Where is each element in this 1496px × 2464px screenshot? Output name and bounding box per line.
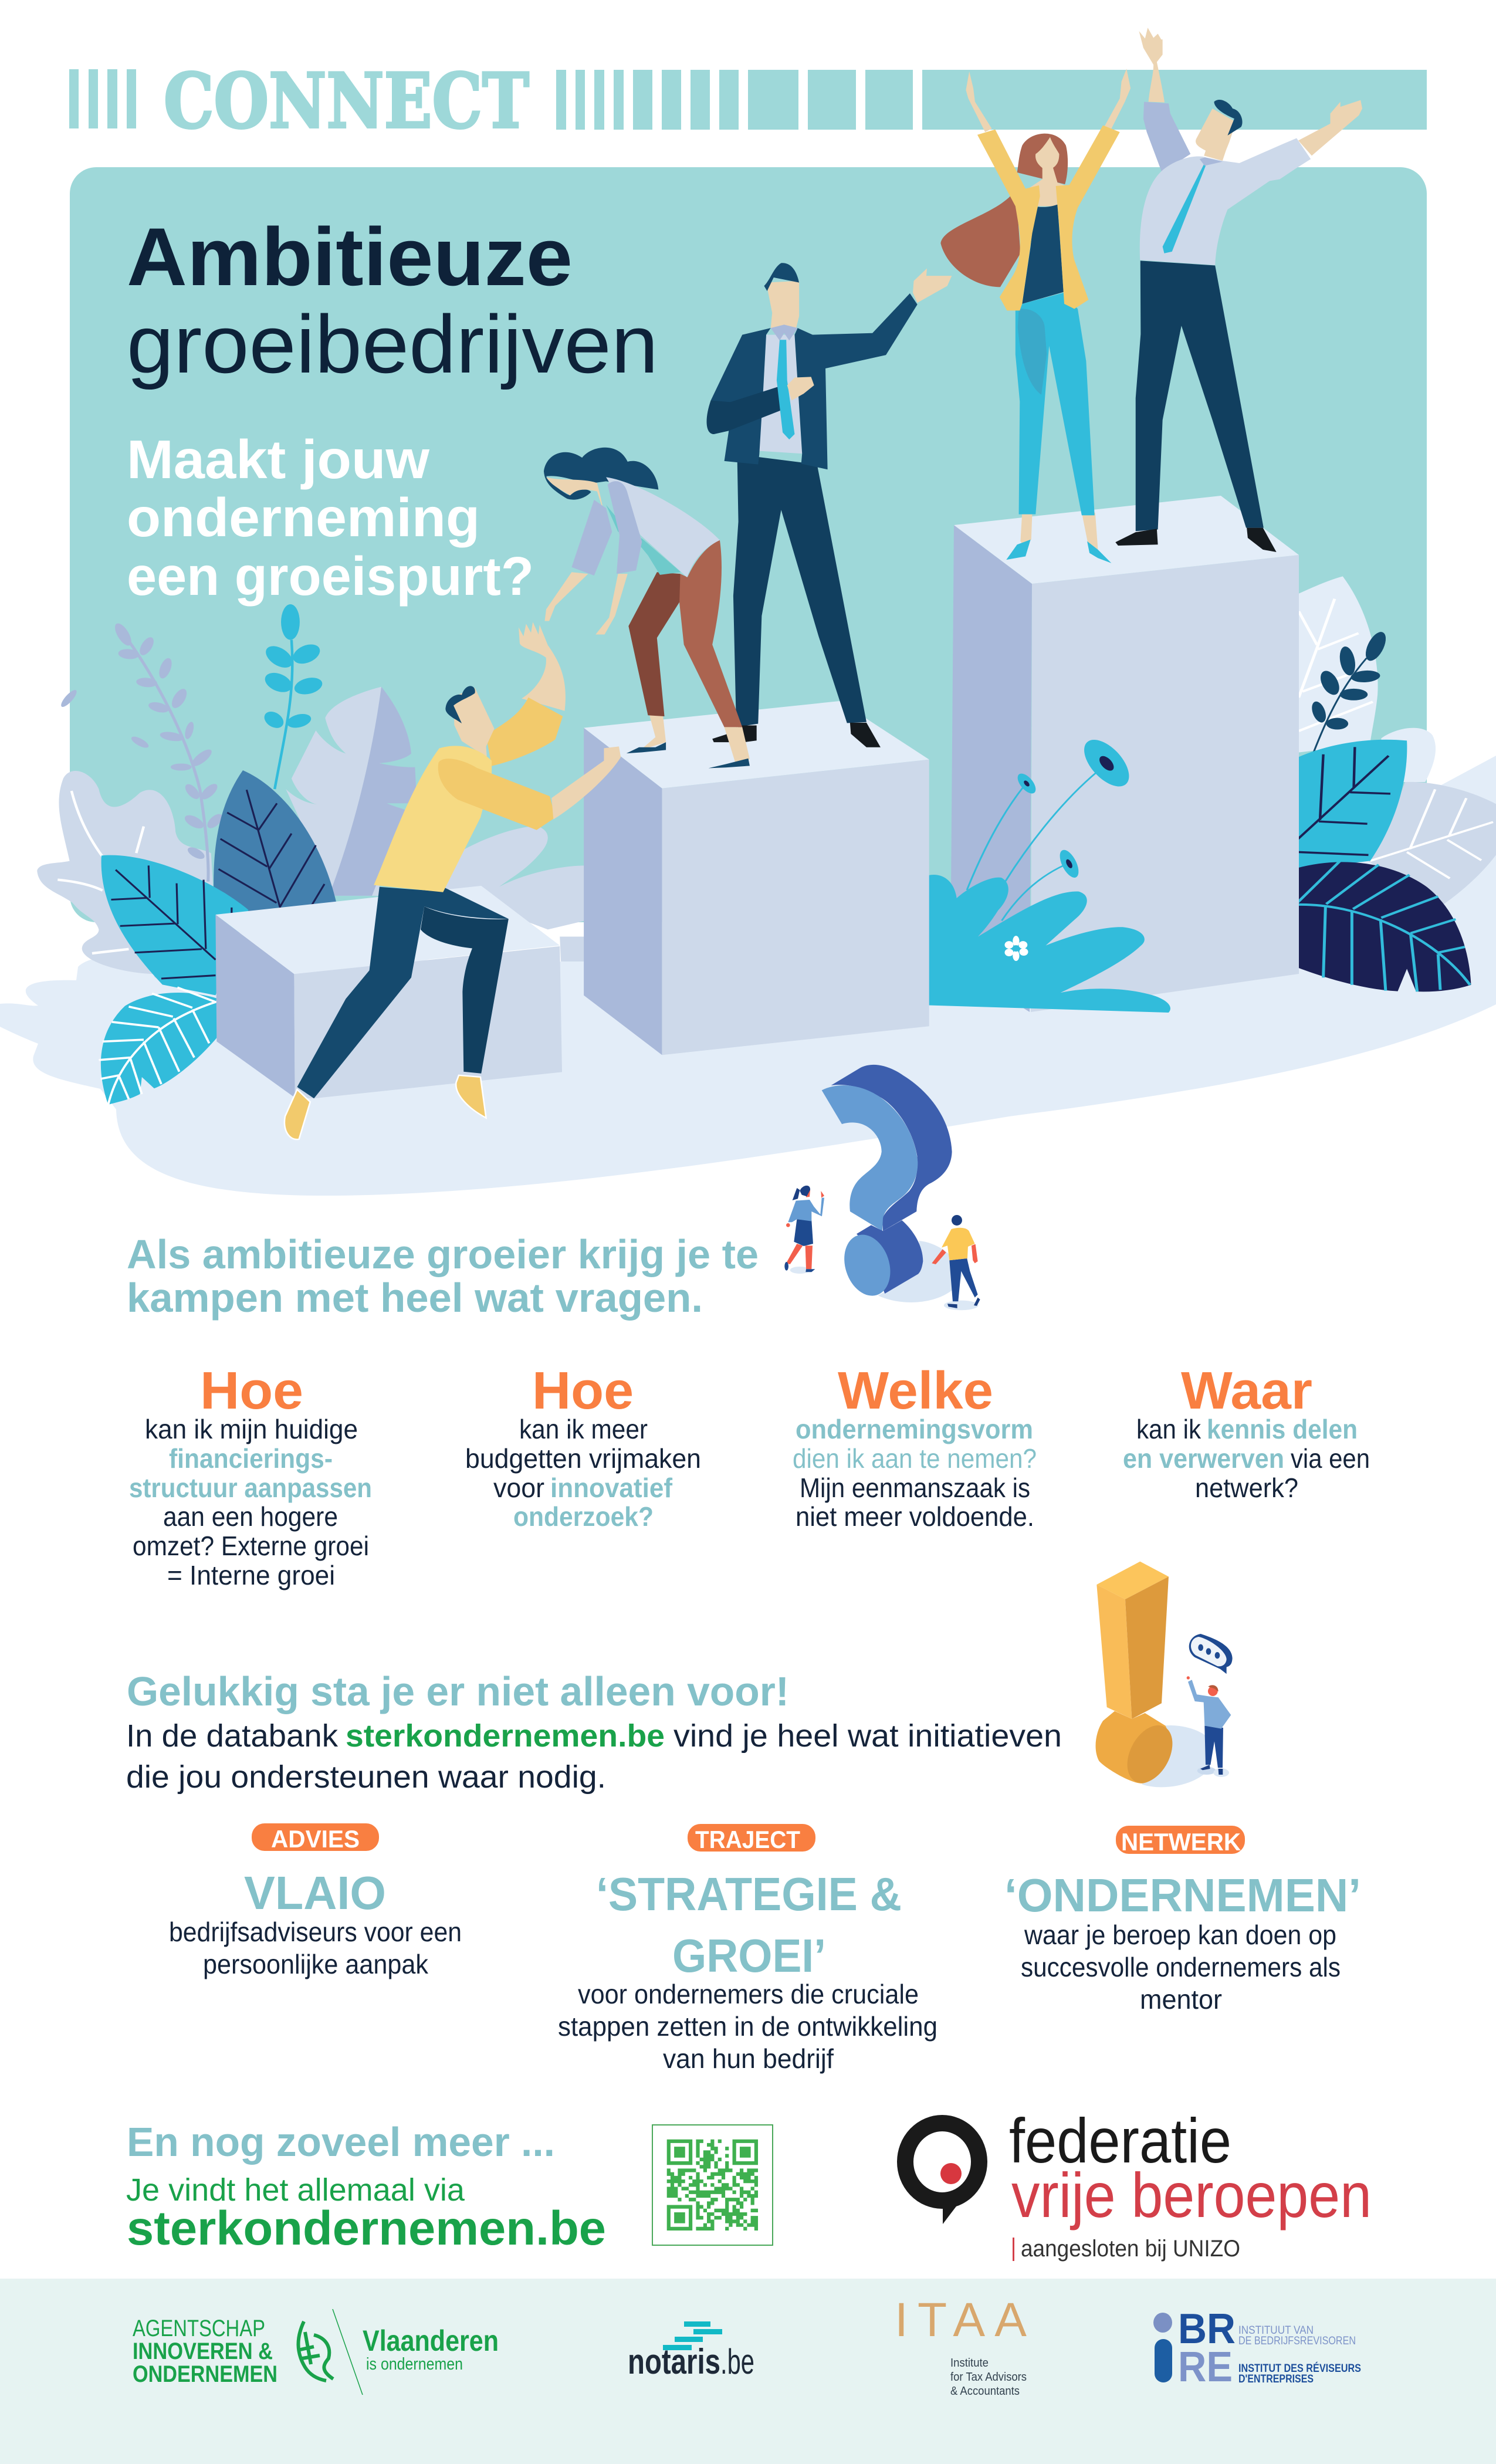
card: Ondernemen netwerk: mentor	[1140, 1984, 1222, 2015]
card: VLAIO advies: persoonlijke aanpak	[203, 1949, 429, 1979]
question column 1: = Interne groei	[167, 1560, 335, 1590]
question column 2: voor	[493, 1473, 544, 1503]
card: Ondernemen netwerk: NETWERK	[1121, 1828, 1241, 1856]
subtitle: growth question	[127, 429, 534, 607]
banner: CONNECT barcode header: CONNECT	[164, 57, 529, 145]
logo: Agentschap Innoveren en Ondernemen / Vlaanderen	[133, 2309, 499, 2395]
question column 2: Hoe	[532, 1362, 634, 1420]
card: Strategie en groei traject: ‘STRATEGIE &	[596, 1868, 902, 1920]
question column 3: dien ik aan te nemen?	[793, 1443, 1037, 1474]
logo: ITAA	[895, 2293, 1027, 2398]
question column 4	[1123, 1362, 1370, 1503]
footer band	[0, 2279, 1496, 2464]
question column 4: netwerk?	[1195, 1473, 1298, 1503]
logo: IBR IRE	[1153, 2306, 1361, 2391]
question column 3: Mijn eenmanszaak is	[800, 1473, 1030, 1503]
question column 1: kan ik mijn huidige	[145, 1414, 358, 1444]
logo: ITAA: for Tax Advisors	[950, 2371, 1027, 2384]
heading: questions intro: kampen met heel wat vragen.	[127, 1275, 703, 1321]
card: Ondernemen netwerk	[1004, 1826, 1361, 2015]
question column 4: kan ik	[1136, 1414, 1201, 1444]
logo: IBR IRE: INSTITUUT VAN	[1238, 2324, 1314, 2337]
logo: IBR IRE: BR	[1178, 2306, 1236, 2353]
question column 4: kennis delen	[1207, 1414, 1358, 1444]
card: Ondernemen netwerk: ‘ONDERNEMEN’	[1004, 1869, 1361, 1921]
text block: databank intro: sterkondernemen.be	[346, 1718, 665, 1754]
block: middle podium	[584, 701, 929, 1055]
question column 1: financierings-	[169, 1443, 333, 1474]
logo: Agentschap Innoveren en Ondernemen / Vlaanderen: INNOVEREN &	[133, 2338, 273, 2364]
text block: databank intro: Gelukkig sta je er niet alleen voor!	[127, 1668, 789, 1714]
panel: teal hero background	[70, 167, 1427, 922]
plants: right foliage group	[1295, 576, 1496, 991]
question column 2: innovatief	[550, 1473, 673, 1503]
card: Strategie en groei traject	[558, 1824, 937, 2074]
question column 1: Hoe	[200, 1362, 303, 1420]
block: left podium	[215, 886, 585, 1098]
question column 1: structuur aanpassen	[129, 1473, 372, 1503]
icon: 3D exclamation mark with person	[1096, 1562, 1233, 1791]
question column 3: ondernemingsvorm	[796, 1414, 1033, 1444]
logo: notaris.be	[628, 2321, 754, 2381]
card: Strategie en groei traject: stappen zetten in de ontwikkeling	[558, 2011, 937, 2042]
question column 4: en verwerven	[1123, 1443, 1284, 1474]
logo: Agentschap Innoveren en Ondernemen / Vlaanderen: Vlaanderen	[363, 2324, 499, 2357]
card: Strategie en groei traject: GROEI’	[672, 1930, 826, 1982]
figure: woman bending down	[544, 448, 750, 768]
question column 2	[465, 1362, 701, 1532]
logo: Agentschap Innoveren en Ondernemen / Vlaanderen: AGENTSCHAP	[133, 2316, 265, 2341]
figure: man climbing the block	[285, 622, 621, 1139]
title: Ambitieuze groeibedrijven: Ambitieuze	[127, 211, 573, 303]
card: Strategie en groei traject: van hun bedrijf	[663, 2043, 834, 2074]
figure: man with raised arms	[1115, 28, 1362, 552]
question column 2: kan ik meer	[519, 1414, 648, 1444]
plants: left foliage group	[37, 604, 585, 1105]
plant: cyan bush with flowers	[928, 734, 1170, 1013]
logo: Agentschap Innoveren en Ondernemen / Vlaanderen: is ondernemen	[366, 2355, 463, 2374]
subtitle: growth question: onderneming	[127, 487, 480, 548]
question column 3: niet meer voldoende.	[796, 1501, 1034, 1532]
block: right podium	[950, 496, 1299, 1012]
heading: questions intro	[127, 1231, 759, 1321]
card: Ondernemen netwerk: waar je beroep kan doen op	[1024, 1920, 1336, 1950]
text block: databank intro	[126, 1668, 1062, 1795]
text block: call to action: sterkondernemen.be	[127, 2202, 606, 2255]
logo: IBR IRE: INSTITUT DES RÉVISEURS	[1238, 2362, 1361, 2375]
subtitle: growth question: Maakt jouw	[127, 429, 430, 490]
card: Ondernemen netwerk: succesvolle ondernemers als	[1021, 1952, 1341, 1982]
question column 2: onderzoek?	[513, 1501, 654, 1532]
logo: Agentschap Innoveren en Ondernemen / Vlaanderen: ONDERNEMEN	[133, 2361, 277, 2387]
figure: woman with raised arms	[940, 69, 1131, 563]
QR code	[652, 2125, 773, 2245]
logo: federatie vrije beroepen	[905, 2105, 1372, 2262]
icon: 3D question mark with people	[784, 1065, 980, 1310]
card: Strategie en groei traject: voor ondernemers die cruciale	[578, 1979, 919, 2009]
logo: notaris.be: .be	[720, 2342, 754, 2381]
text block: call to action	[126, 2119, 606, 2255]
question column 4: Waar	[1181, 1362, 1312, 1420]
question column 3	[793, 1362, 1037, 1532]
text block: databank intro: die jou ondersteunen waar nodig.	[126, 1759, 606, 1795]
card: VLAIO advies: ADVIES	[271, 1825, 360, 1853]
logo: IBR IRE: DE BEDRIJFSREVISOREN	[1238, 2335, 1356, 2347]
title: Ambitieuze groeibedrijven	[127, 211, 658, 390]
logo: federatie vrije beroepen: aangesloten bij UNIZO	[1021, 2236, 1240, 2262]
title: Ambitieuze groeibedrijven: groeibedrijven	[127, 298, 658, 390]
banner: CONNECT barcode header	[69, 57, 1427, 145]
question column 4: via een	[1291, 1443, 1370, 1474]
ground: pale blue floor shape	[0, 756, 1496, 1196]
text block: databank intro: vind je heel wat initiatieven	[673, 1718, 1062, 1754]
question column 1: omzet? Externe groei	[133, 1531, 369, 1561]
question column 1: aan een hogere	[163, 1501, 338, 1532]
question column 2: budgetten vrijmaken	[465, 1443, 701, 1474]
question column 3: Welke	[838, 1362, 993, 1420]
logo: ITAA: ITAA	[895, 2293, 1027, 2347]
logo: federatie vrije beroepen: federatie	[1009, 2105, 1231, 2176]
logo: notaris.be: notaris	[628, 2342, 720, 2381]
card: Strategie en groei traject: TRAJECT	[695, 1826, 800, 1853]
figure: man in suit	[707, 263, 952, 747]
subtitle: growth question: een groeispurt?	[127, 546, 534, 607]
heading: questions intro: Als ambitieuze groeier krijg je te	[127, 1231, 759, 1277]
text block: databank intro: In de databank	[126, 1718, 339, 1754]
question column 1	[129, 1362, 372, 1590]
logo: ITAA: Institute	[950, 2357, 989, 2370]
card: VLAIO advies	[169, 1823, 462, 1979]
logo: IBR IRE: D'ENTREPRISES	[1238, 2373, 1314, 2385]
logo: IBR IRE: RE	[1178, 2344, 1233, 2391]
logo: federatie vrije beroepen: vrije beroepen	[1011, 2160, 1372, 2231]
text block: call to action: Je vindt het allemaal via	[126, 2172, 465, 2208]
text block: call to action: En nog zoveel meer ...	[127, 2119, 555, 2165]
logo: ITAA: & Accountants	[950, 2385, 1020, 2398]
card: VLAIO advies: bedrijfsadviseurs voor een	[169, 1917, 462, 1947]
card: VLAIO advies: VLAIO	[244, 1867, 386, 1919]
